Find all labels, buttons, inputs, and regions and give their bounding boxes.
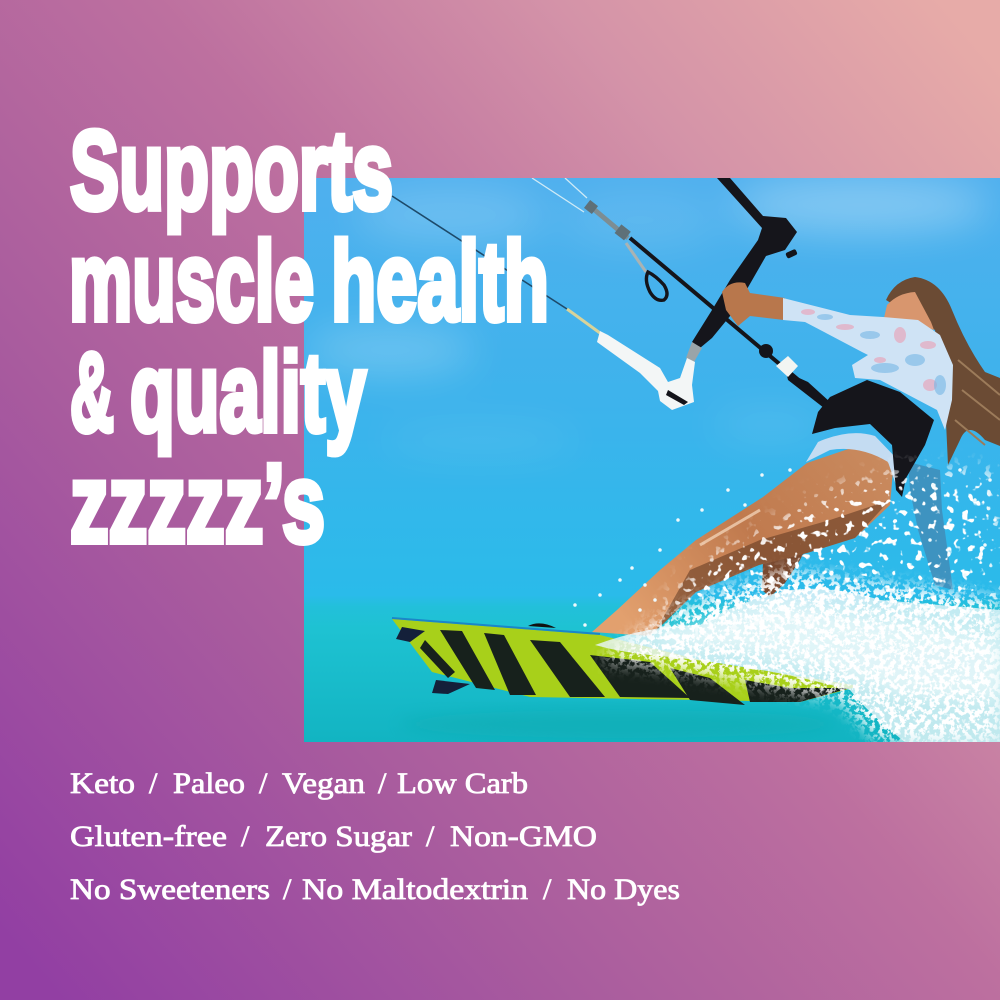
headline line: ampersand: & (70, 330, 114, 455)
bikini (806, 433, 896, 484)
sleeve and top (783, 298, 953, 430)
fins and foot strap (396, 623, 556, 694)
attributes row 1: / (378, 767, 387, 800)
attributes row 3 (70, 873, 680, 906)
bar end float (597, 331, 695, 410)
attributes row 1: Paleo (173, 767, 245, 800)
leg shading (655, 500, 890, 632)
hair (886, 277, 1000, 465)
headline line: quality: quality (130, 330, 366, 455)
rear leg (762, 505, 810, 597)
attributes row 1: / (259, 767, 268, 800)
headline line: Supports: Supports (70, 108, 393, 233)
attribute list (70, 767, 680, 906)
attributes row 3: No Sweeteners (70, 873, 270, 906)
control bar (692, 178, 797, 348)
water droplets (575, 470, 995, 625)
attributes row 3: / (283, 873, 292, 906)
attributes row 2: Zero Sugar (265, 820, 412, 853)
sea shading (443, 713, 797, 734)
sky and sea (304, 178, 1000, 742)
clouds (305, 177, 990, 458)
leg highlight (700, 510, 760, 545)
attributes row 1 (70, 767, 528, 800)
board (392, 618, 860, 705)
headline line: health: health (331, 219, 549, 344)
arm and hand (722, 282, 785, 326)
attributes row 2 (70, 820, 597, 853)
bar white grip (776, 356, 798, 377)
attributes row 3: No Maltodextrin (302, 873, 528, 906)
attributes row 1: Low Carb (397, 767, 528, 800)
kite lines (392, 178, 800, 378)
attributes row 3: No Dyes (567, 873, 680, 906)
attributes row 3: / (543, 873, 552, 906)
water splash (595, 470, 1000, 742)
attributes row 2: Gluten-free (70, 820, 227, 853)
headline line: muscle: muscle (69, 219, 314, 344)
attributes row 2: / (426, 820, 435, 853)
small bar details (666, 249, 830, 408)
attributes row 2: Non-GMO (450, 820, 597, 853)
rear arm (908, 462, 953, 590)
attributes row 2: / (241, 820, 250, 853)
kitesurfing photo (304, 177, 1000, 742)
headline line: zzzzz's: zzzzz’s (70, 441, 325, 566)
line clips (584, 200, 631, 240)
attributes row 1: Vegan (282, 767, 365, 800)
headline (69, 108, 549, 566)
face (884, 292, 934, 330)
attributes row 1: / (149, 767, 158, 800)
harness (812, 380, 934, 497)
attributes row 1: Keto (70, 767, 135, 800)
bar grey sleeve (686, 342, 702, 362)
thigh and lower leg (592, 445, 894, 636)
